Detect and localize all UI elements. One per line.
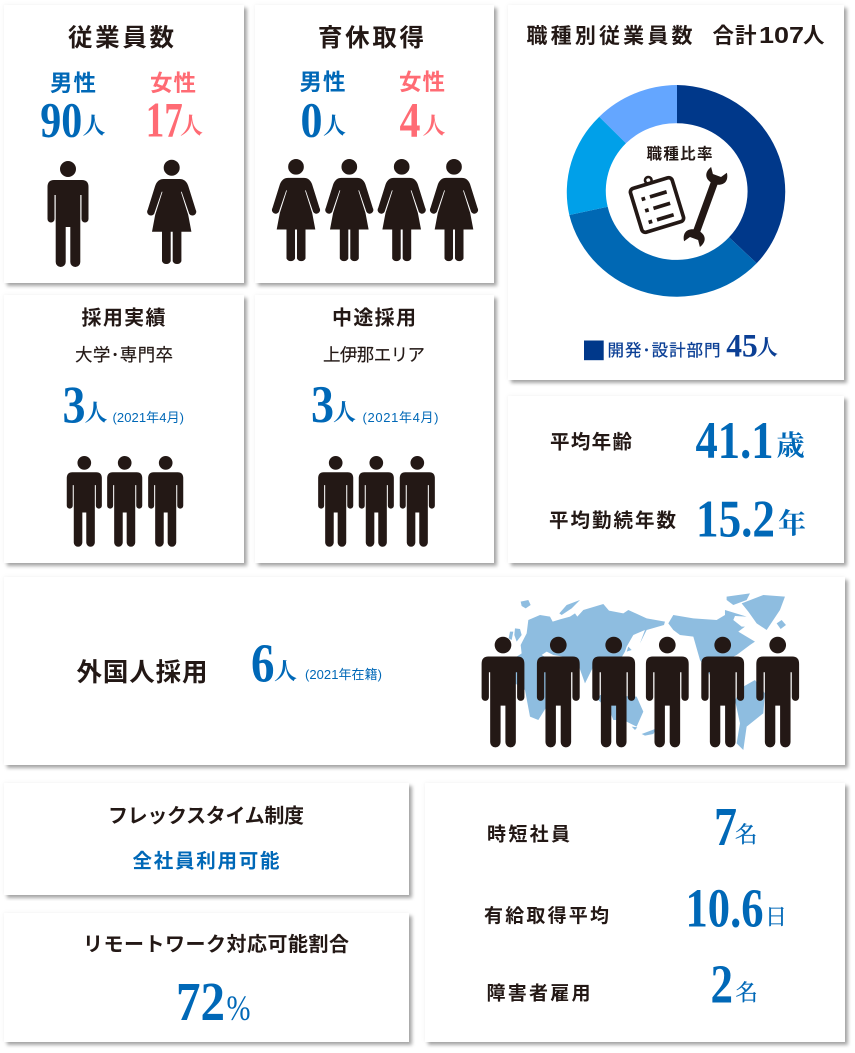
legend number: 45 (726, 329, 758, 365)
icons: four women (272, 159, 478, 261)
panel: employee count (4, 5, 244, 283)
number: 6: 6 (251, 632, 274, 694)
unit: people: 人 (333, 394, 356, 427)
heading: 外国人採用 (76, 659, 208, 687)
heading: リモートワーク対応可能割合 (83, 933, 349, 956)
status text: 全社員利用可能 (132, 850, 280, 872)
icons: three men (318, 456, 435, 547)
label: average paid leave: 有給取得平均 (484, 905, 609, 927)
icon: woman (147, 160, 196, 264)
number: 7: 7 (714, 796, 737, 857)
panel: average age and tenure (508, 396, 844, 563)
heading: employee count: 従業員数 (68, 24, 174, 52)
unit: people: 人 (82, 108, 106, 140)
icon: wrench (682, 166, 729, 248)
number: 4 women: 4 (400, 92, 420, 148)
unit: people: 人 (274, 653, 297, 686)
heading: 採用実績 (82, 306, 166, 330)
number: 10.6: 10.6 (686, 878, 764, 938)
unit: years: 年 (778, 502, 806, 542)
unit: days: 日 (765, 900, 787, 932)
heading: childcare leave: 育休取得 (318, 24, 424, 52)
number: 3: 3 (62, 376, 86, 434)
label: female: 女性 (399, 70, 445, 95)
panel: remote work (4, 913, 409, 1042)
heading: total 107: 合計 (712, 24, 757, 48)
number: 0 men: 0 (300, 92, 322, 148)
date note: (2021年4月) (112, 410, 184, 425)
number: 15.2: 15.2 (696, 490, 775, 548)
subheading: 大学･専門卒 (75, 345, 173, 365)
heading: employees by job type: 職種別従業員数 (526, 25, 692, 48)
number: 3: 3 (311, 376, 334, 434)
panel: childcare leave (255, 5, 494, 283)
number: 2: 2 (710, 954, 733, 1014)
unit: persons: 名 (735, 818, 758, 850)
number: 17 women: 17 (146, 92, 183, 148)
number: 90 men: 90 (40, 92, 82, 148)
unit: persons: 名 (736, 976, 758, 1008)
icons: three men (67, 456, 183, 547)
panel: flextime (4, 783, 409, 895)
label: male: 男性 (50, 71, 96, 96)
icon: man (48, 161, 88, 267)
panel: mid-career hires (255, 295, 494, 563)
heading: total 107: 人 (803, 24, 825, 48)
label: average tenure: 平均勤続年数 (549, 509, 676, 532)
icon: clipboard (628, 170, 685, 233)
world map (509, 593, 786, 750)
subheading: 上伊那エリア (323, 345, 425, 365)
label: disability employment: 障害者雇用 (486, 982, 590, 1004)
label: female: 女性 (150, 71, 196, 96)
donut centre label: 職種比率 (646, 145, 712, 163)
legend unit: 人 (756, 331, 778, 362)
number: 72: 72 (176, 971, 225, 1032)
number: 41.1: 41.1 (696, 412, 774, 470)
icons: six men (482, 637, 799, 747)
unit: years old: 歳 (776, 424, 805, 464)
donut chart (567, 85, 785, 297)
unit: people: 人 (180, 108, 203, 140)
panel: other stats (425, 783, 845, 1042)
unit: people: 人 (323, 108, 346, 140)
heading: total 107: 107 (759, 22, 804, 48)
unit: percent: % (226, 988, 250, 1028)
label: average age: 平均年齢 (550, 431, 632, 454)
legend swatch (584, 340, 604, 360)
label: short-hours staff: 時短社員 (487, 824, 570, 846)
date note: (2021年4月) (362, 410, 438, 425)
unit: people: 人 (422, 108, 446, 140)
heading: 中途採用 (332, 306, 416, 330)
legend label: 開発･設計部門 (608, 341, 720, 360)
panel: foreign hires (4, 577, 845, 765)
heading: フレックスタイム制度 (108, 805, 304, 828)
date note: (2021年在籍) (305, 667, 382, 682)
panel: new graduate hires (4, 295, 244, 563)
label: male: 男性 (300, 70, 346, 95)
unit: people: 人 (84, 394, 108, 428)
panel: employees by job type (508, 5, 844, 380)
